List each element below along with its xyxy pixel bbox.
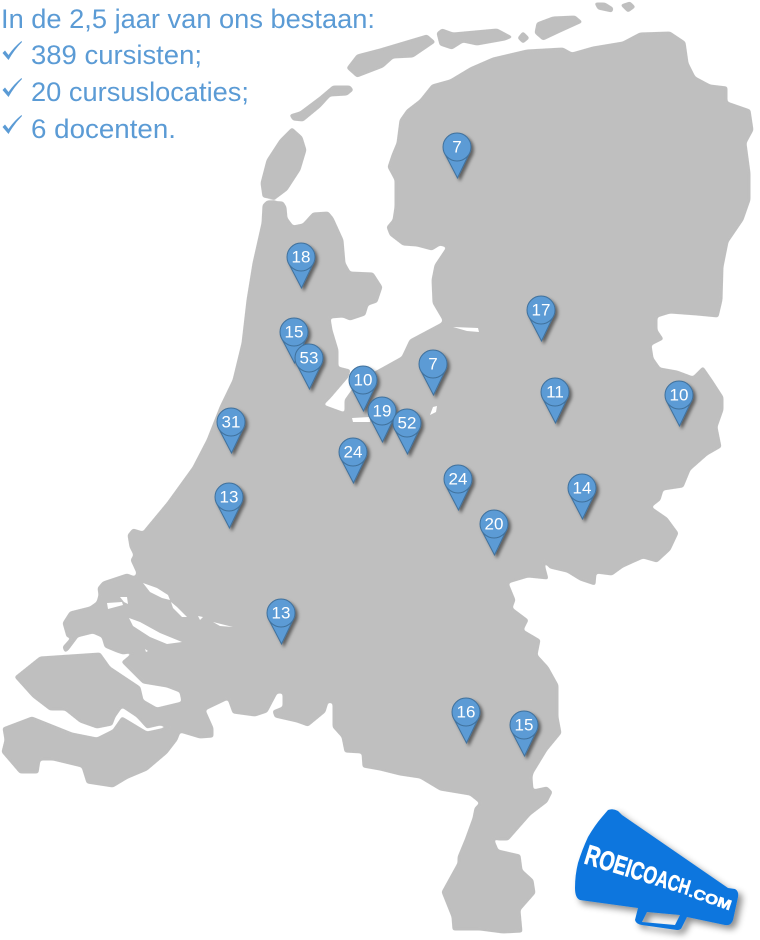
- pin: 7 Friesland: 7: [452, 138, 462, 156]
- pin: 31: 31: [222, 412, 240, 432]
- island: Ameland: [437, 29, 512, 49]
- island: Texel: [261, 128, 306, 199]
- pin: 7 Friesland: [443, 133, 471, 178]
- island: Vlieland: [290, 86, 353, 121]
- pin: 24 Gelderland: 24: [449, 470, 467, 488]
- pin: 15 Limburg: 15: [515, 716, 533, 734]
- island: Terschelling: [347, 35, 435, 77]
- island: Rottumerplaat: [621, 2, 635, 12]
- pin: 19: [368, 397, 396, 442]
- megaphone icon: [575, 809, 738, 930]
- pin: 18: [287, 243, 315, 288]
- pin: 15 Limburg: [510, 711, 538, 756]
- logo text: ROEICOACH: [581, 840, 695, 902]
- pin: 10 Twente: 10: [670, 386, 688, 404]
- pin: 19: 19: [373, 402, 391, 420]
- pin: 24 Gelderland: [444, 465, 472, 510]
- pin: 17: [527, 296, 555, 341]
- pin: 53: [295, 344, 323, 389]
- logo: megaphone with ROEICOACH.COM: [575, 809, 738, 930]
- pin: 7 Flevoland: [419, 350, 447, 395]
- heading: In de 2,5 jaar van ons bestaan:: [1, 4, 375, 34]
- pin: 13 Zuid-Holland: [215, 483, 243, 528]
- pin: 13 Zuid-Holland: 13: [220, 488, 238, 506]
- pin: 11: [541, 378, 569, 423]
- pin: 16: [452, 698, 480, 743]
- list item: cursisten: 389 cursisten;: [31, 40, 202, 70]
- pin: 17: 17: [532, 300, 550, 320]
- pin: 7 Flevoland: 7: [428, 354, 438, 374]
- pin: 20: [480, 510, 508, 555]
- island: Rottumeroog: [595, 3, 613, 12]
- pin: 13 Brabant: [267, 599, 295, 644]
- pin: 11: 11: [546, 382, 564, 402]
- pin: 24 Utrecht west: [339, 438, 367, 483]
- pin: 15 Noord-Holland: [280, 318, 308, 363]
- inland water: [107, 327, 479, 652]
- pin: 13 Brabant: 13: [272, 604, 290, 622]
- pin: 53: 53: [300, 348, 318, 368]
- pin: 18: 18: [292, 248, 310, 266]
- pin: 14: [568, 474, 596, 519]
- pin: 52: 52: [398, 414, 416, 432]
- list item: docenten: 6 docenten.: [31, 114, 176, 144]
- heading and list: [1, 4, 375, 144]
- pin: 52: [393, 409, 421, 454]
- pin: 24 Utrecht west: 24: [344, 442, 362, 462]
- logo domain suffix: .COM: [687, 885, 733, 914]
- pin: 10 Amsterdam: [349, 366, 377, 411]
- pin: 10 Twente: [665, 381, 693, 426]
- island: small sandbank: [518, 32, 529, 43]
- pin: 14: 14: [573, 478, 591, 498]
- pin: 15 Noord-Holland: 15: [285, 322, 303, 342]
- location pins: [215, 133, 693, 756]
- pin: 31: [217, 408, 245, 453]
- island: Schiermonnikoog: [535, 16, 582, 40]
- pin: 16: 16: [457, 702, 475, 722]
- pin: 10 Amsterdam: 10: [354, 370, 372, 390]
- list item: cursuslocaties: 20 cursuslocaties;: [31, 77, 249, 107]
- pin: 20: 20: [485, 514, 503, 534]
- islet: Zeeland: [63, 637, 77, 652]
